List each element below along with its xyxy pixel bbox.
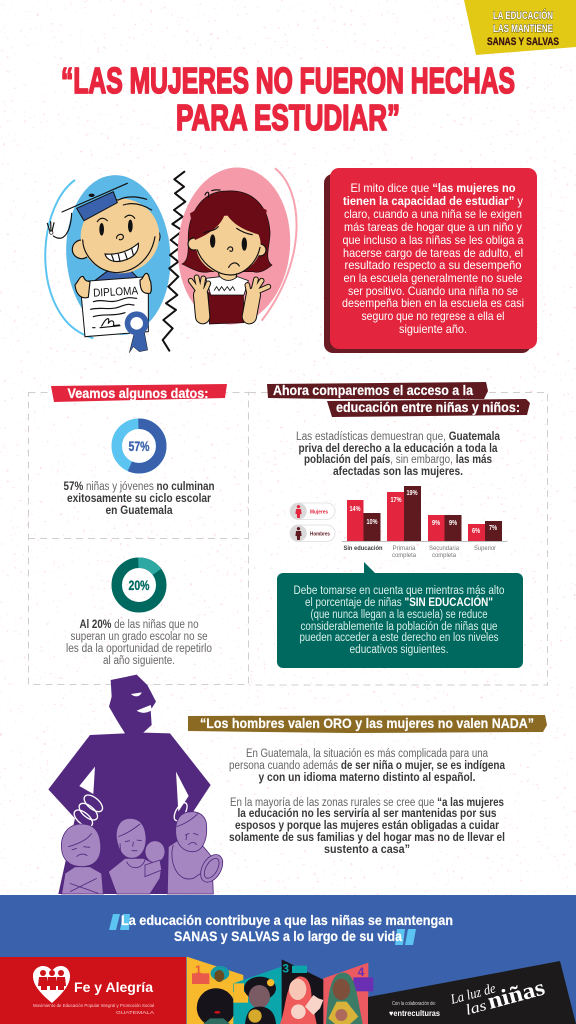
callout: sin educacion note: considerablemente la población de niñas que (300, 621, 498, 633)
callout: sin educacion note: Debe tomarse en cuenta que mientras más alto (294, 585, 504, 597)
text: indigenous girls situation: la educación no les serviría al ser mantenidas por sus (238, 808, 496, 820)
legend: mujeres and hombres (290, 503, 335, 542)
icon: heart with children (33, 966, 70, 1003)
callout: sin educacion note: el porcentaje de niñas "SIN EDUCACIÓN" (305, 596, 493, 609)
donut chart: 20%: 20% (128, 577, 150, 593)
corner tag: campaign label: LAS MANTIENE (493, 23, 553, 35)
man silhouette (48, 675, 211, 894)
panel: myth explanation: El mito dice que “las mujeres no (350, 181, 516, 195)
text: 20% stat: les da la oportunidad de repetirlo (66, 643, 212, 655)
worried girl (171, 163, 297, 329)
callout: sin educacion note (277, 562, 523, 668)
panel 1: girl with yellow halo (187, 957, 243, 1024)
bar chart: education access by sex: 19% (406, 490, 418, 497)
bar chart: education access by sex: completa (432, 552, 456, 559)
illustration: man towering over women and girls (48, 675, 227, 894)
donut chart: 57% (117, 424, 161, 468)
quote band text: La educación contribuye a que las niñas se mantengan (121, 913, 453, 928)
logo block: Fe y Alegría: Movimiento de Educación Popular Integral y Promoción Social (33, 1003, 154, 1008)
bar chart: education access by sex: 10% (366, 519, 378, 526)
logo block: Fe y Alegría: Fe y Alegría (74, 980, 154, 995)
panel: myth explanation: desempeña bien en la escuela es casi (342, 296, 524, 310)
panel 3: red haired girl (280, 959, 324, 1024)
girl with bowed head (61, 824, 103, 894)
panel 2: girl with curly hair (233, 967, 282, 1024)
corner tag: campaign label (464, 0, 576, 55)
donut chart: 57%: 57% (128, 438, 150, 454)
boy with diploma (45, 172, 176, 353)
bar chart: education access by sex (342, 486, 507, 559)
bar chart: education access by sex: Secundaria (429, 545, 459, 552)
panel: myth explanation: resultado respecto a su desempeño (344, 258, 522, 272)
bar chart: education access by sex: 9% (449, 520, 458, 527)
text: 57% stat: 57% niñas y jóvenes no culminan (64, 481, 214, 493)
bar chart: education access by sex: 9% (432, 520, 441, 527)
panel 4: girl with green headscarf (323, 963, 373, 1024)
text: 57% stat: en Guatemala (106, 505, 173, 517)
bar chart: education access by sex: Primaria (392, 545, 416, 552)
boy with diploma: DIPLOMA (93, 285, 139, 300)
text: statistics intro: población del país, sin embargo, las más (304, 454, 492, 466)
text: statistics intro: Las estadísticas demuestran que, Guatemala (296, 431, 501, 443)
panel: myth explanation (324, 168, 537, 353)
text: indigenous girls situation: solamente de sus familias y del hogar mas no de llevar el (229, 832, 505, 844)
text: 20% stat: al año siguiente. (103, 655, 175, 667)
heading: comparison of access to education: Ahora comparemos el acceso a la (273, 383, 473, 398)
bar chart: education access by sex: 6% (472, 528, 481, 535)
logo block: Fe y Alegría (0, 957, 186, 1024)
text: indigenous girls situation: sustento a casa” (324, 844, 410, 856)
panel: la luz de las niñas (368, 961, 576, 1024)
text: indigenous girls situation: y con un idioma materno distinto al español. (258, 772, 476, 784)
text: indigenous girls situation: En la mayoría de las zonas rurales se cree que “a las mujeres (230, 797, 504, 809)
panel 3: red haired girl: 3 (282, 962, 289, 976)
panel 1: girl with yellow halo: 1 (195, 963, 202, 977)
donut chart: 20% (117, 563, 161, 607)
text: indigenous girls situation: persona cuando además de ser niña o mujer, se es indígena (229, 760, 506, 772)
text: 20% stat: Al 20% de las niñas que no (80, 619, 198, 631)
bar chart: education access by sex: 7% (489, 525, 498, 532)
callout: sin educacion note: educativos siguientes. (350, 644, 448, 656)
text: statistics intro: priva del derecho a la educación a toda la (298, 443, 498, 455)
callout: sin educacion note: (que nunca llegan a la escuela) se reduce (310, 609, 488, 621)
panel: la luz de las niñas: niñas (485, 975, 547, 1014)
heading: comparison of access to education: educación entre niñas y niños: (336, 400, 520, 415)
title (61, 60, 515, 138)
panel: myth explanation: ser positivo. Cuando una niña no se (348, 284, 518, 298)
bar chart: education access by sex: 17% (390, 497, 402, 504)
panel: myth explanation: seguro que no regrese a ella el (362, 309, 504, 323)
zigzag divider (163, 172, 185, 351)
heading: veamos algunos datos: Veamos algunos datos: (68, 385, 208, 401)
corner tag: campaign label: LA EDUCACIÓN (493, 9, 553, 22)
illustration: graduate boy and worried girl (45, 163, 297, 353)
quote band text: SANAS y SALVAS a lo largo de su vida (174, 929, 402, 944)
heading: los hombres valen oro: “Los hombres valen ORO y las mujeres no valen NADA” (200, 715, 534, 731)
woman washing a plate (167, 812, 227, 894)
panel: la luz de las niñas: las (464, 998, 488, 1019)
blue band (0, 895, 576, 1024)
panel 4: girl with green headscarf: 4 (358, 965, 365, 979)
bar chart: education access by sex: 14% (350, 506, 361, 513)
panel: myth explanation: en la escuela generalmente no suele (344, 271, 523, 285)
bar chart: education access by sex: Sin educación (344, 545, 383, 552)
legend: mujeres and hombres: Mujeres (310, 510, 328, 516)
panel: la luz de las niñas: ♥entreculturas (389, 1009, 441, 1018)
panel: myth explanation: tienen la capacidad de estudiar” y (343, 194, 523, 208)
title: PARA ESTUDIAR” (176, 97, 400, 138)
panel: la luz de las niñas: La luz de (448, 981, 497, 1008)
text: indigenous girls situation: En Guatemala, la situación es más complicada para una (246, 748, 488, 760)
panel: myth explanation: hacerse cargo de tareas de adulto, el (343, 246, 523, 260)
text: indigenous girls situation: esposos y porque las mujeres están obligadas a cuidar (235, 820, 499, 832)
text: 20% stat (66, 619, 212, 667)
text: 57% stat (64, 481, 214, 517)
logo block: Fe y Alegría: GUATEMALA (116, 1010, 154, 1015)
heading: comparison of access to education (267, 382, 530, 417)
woman holding baby (108, 818, 165, 894)
legend: mujeres and hombres: Hombres (310, 532, 330, 538)
text: statistics intro (296, 431, 501, 478)
bar chart: education access by sex: Superior (474, 545, 497, 552)
panel: myth explanation: claro, cuando a una niña se le exigen (344, 207, 522, 221)
text: 20% stat: superan un grado escolar no se (70, 631, 208, 643)
panel: la luz de las niñas: Con la colaboración de: (392, 1001, 436, 1007)
text: indigenous girls situation (229, 748, 506, 856)
quote band text (109, 913, 453, 945)
panel: myth explanation: siguiente año. (399, 322, 467, 336)
panel: myth explanation: que incluso a las niñas se les obliga a (342, 233, 524, 247)
bar chart: education access by sex: completa (392, 552, 416, 559)
text: 57% stat: exitosamente su ciclo escolar (67, 493, 211, 505)
illustration: four girls campaign panels (187, 957, 373, 1024)
panel: myth explanation: más tareas de hogar que a un niño y (344, 220, 522, 234)
callout: sin educacion note: pueden acceder a este derecho en los niveles (300, 632, 499, 644)
text: statistics intro: afectadas son las mujeres. (333, 466, 463, 478)
